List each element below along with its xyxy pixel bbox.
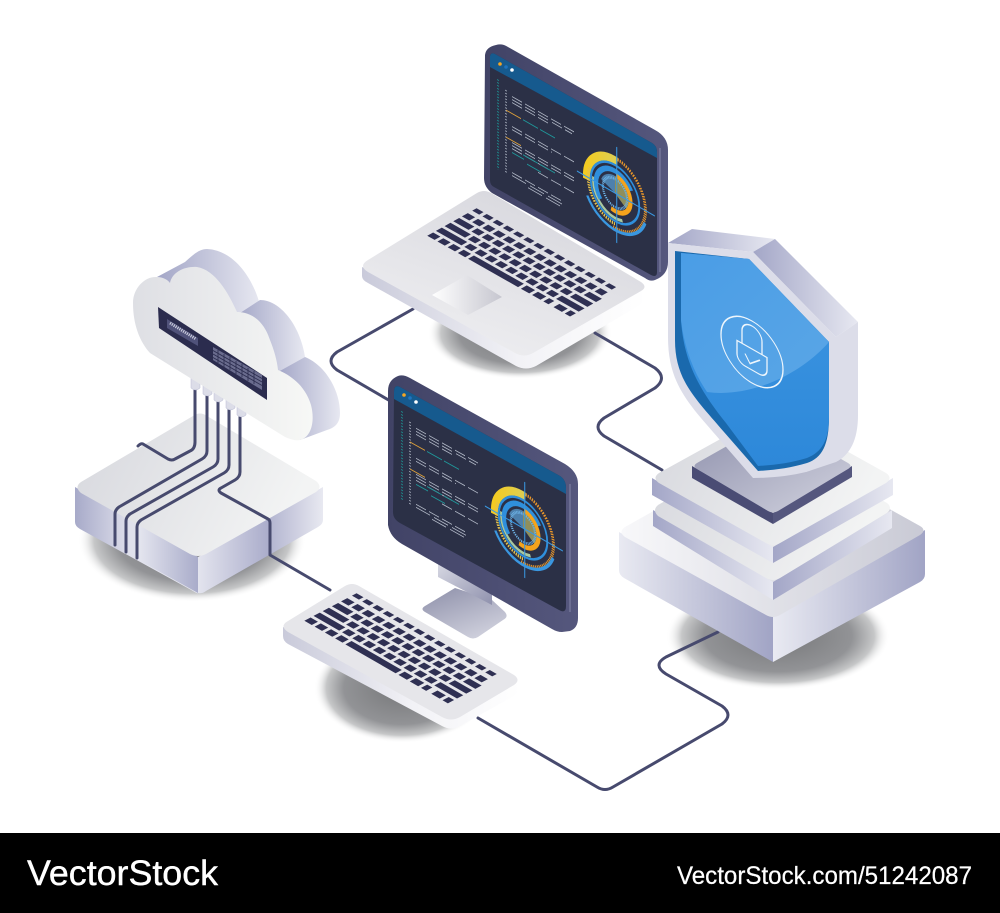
cloud-to-router wires	[115, 390, 330, 590]
dark mount plate	[692, 420, 852, 524]
laptop base	[362, 191, 646, 368]
shield highlight	[681, 253, 829, 393]
shield face dark edge	[675, 251, 829, 471]
shield face	[681, 253, 829, 466]
laptop keyboard	[430, 209, 617, 315]
pedestal upper layer	[652, 410, 893, 563]
monitor code lines	[402, 411, 478, 545]
monitor screen	[393, 386, 570, 612]
cable connectors	[191, 378, 246, 417]
network cables	[331, 309, 728, 790]
footer brand: VectorStock	[27, 854, 219, 893]
monitor	[388, 375, 578, 638]
shield lock icon	[721, 303, 783, 401]
footer bar	[0, 833, 1000, 913]
shield rim	[668, 243, 836, 478]
cloud server panel	[158, 307, 267, 400]
cloud	[133, 249, 340, 440]
external keyboard	[283, 584, 520, 728]
laptop radar gauge	[577, 124, 655, 265]
laptop code lines	[498, 80, 574, 214]
monitor stand	[422, 563, 507, 638]
external keyboard keys	[307, 594, 498, 702]
laptop screen bezel	[484, 44, 668, 281]
shadow: router	[78, 478, 306, 602]
laptop touchpad	[432, 275, 502, 315]
laptop screen	[490, 53, 660, 276]
shadow: keyboard	[314, 633, 490, 743]
shadow: laptop	[428, 287, 612, 379]
monitor radar gauge	[485, 459, 563, 600]
shadow: shield base	[666, 582, 890, 690]
pedestal middle layer	[653, 440, 892, 600]
pedestal bottom slab	[619, 444, 925, 662]
monitor bezel	[388, 375, 578, 632]
shield	[668, 229, 858, 478]
shield extrusion	[668, 229, 858, 472]
laptop	[362, 44, 668, 368]
shield pedestal	[619, 410, 925, 662]
footer image URL: VectorStock.com/51242087	[677, 862, 972, 890]
router box	[75, 414, 323, 593]
